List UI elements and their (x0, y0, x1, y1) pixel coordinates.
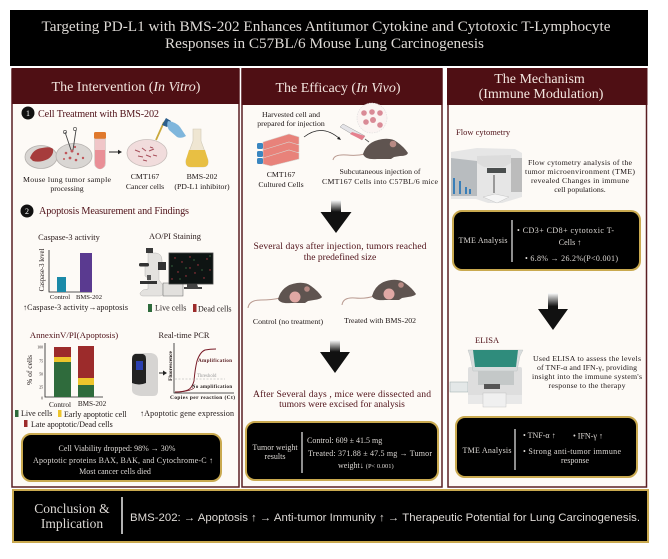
callout: TME analysis, T-cells (453, 211, 640, 270)
callout: viability findings (22, 434, 221, 481)
callout: TME analysis, T-cells: TME Analysis (458, 236, 508, 245)
callout: TME analysis, cytokines: response (561, 456, 589, 465)
label: subcutaneous injection (322, 167, 439, 186)
chart: caspase-3 activity: Caspase-3 activity (38, 233, 101, 242)
icon: AO/PI microscope and monitor: Live cells (155, 304, 186, 312)
callout: TME analysis, cytokines: • IFN-γ ↑ (573, 432, 603, 440)
text: flow cytometry description: cell populations. (554, 185, 606, 194)
icon: culture dish with pipette (127, 118, 186, 166)
text: flow cytometry description (525, 158, 635, 194)
label: harvested cells: prepared for injection (257, 119, 325, 128)
callout: tumor weight results (246, 422, 438, 480)
chart: real-time PCR: Threshold (197, 374, 217, 379)
callout: TME analysis, T-cells: Cells ↑ (559, 238, 581, 247)
callout: TME analysis, cytokines: • TNF-α ↑ (523, 431, 556, 440)
panel heading: the intervention (12, 68, 239, 104)
panel: the intervention (12, 68, 239, 487)
conclusion banner: Conclusion & (34, 501, 110, 516)
text: dissection: After Several days , mice were dissected and (253, 389, 431, 400)
icon: flow cytometer (451, 148, 522, 203)
icon: mouse (333, 139, 408, 160)
chart: real-time PCR: Real-time PCR (159, 331, 210, 340)
title banner: Responses in C57BL/6 Mouse Lung Carcinogenesis (165, 36, 484, 52)
label: cultured cells: Cultured Cells (258, 180, 304, 189)
callout: TME analysis, cytokines: • Strong anti-tumor immune (523, 447, 621, 456)
panel heading: the mechanism (447, 68, 648, 105)
panel heading: the efficacy (242, 68, 442, 105)
label: mouse groups: Control (no treatment) (253, 317, 323, 326)
legend: annexin V/PI: Live cells (21, 409, 52, 418)
icon: control mouse (248, 283, 322, 308)
step 1 labels: Mouse lung tumor sample (23, 175, 112, 184)
text: flow cytometry description: revealed Changes in immune (531, 176, 630, 185)
text: tumors reached size: the predefined size (304, 252, 376, 263)
arrow: flasks to mouse (304, 130, 341, 140)
label: mouse groups (253, 316, 416, 326)
callout: tumor weight results: Tumor weight (252, 443, 298, 452)
chart: annexin V/PI apoptosis: 25 (39, 386, 43, 390)
callout: tumor weight results: weight↓ (P< 0.001) (338, 461, 394, 470)
icon: AO/PI microscope and monitor (139, 232, 232, 314)
label: flow cytometry: Flow cytometry (456, 127, 511, 137)
conclusion banner: Implication (41, 516, 103, 531)
label: harvested cells (257, 110, 325, 128)
icon: tumor sample dishes (25, 127, 106, 169)
step 1 heading: Cell Treatment with BMS-202 (38, 109, 159, 120)
chart: annexin V/PI apoptosis: 50 (39, 372, 43, 376)
text: tumors reached size: Several days after injection, tumors reached (254, 241, 427, 252)
step 1 labels: BMS-202 (187, 172, 217, 181)
panel heading: the mechanism: (Immune Modulation) (479, 87, 604, 102)
icon: ELISA analyzer (450, 350, 523, 407)
label: subcutaneous injection: CMT167 Cells into C57BL/6 mice (322, 177, 439, 186)
text: ELISA description (532, 354, 642, 390)
chart: caspase-3 activity: Control (50, 294, 70, 301)
step 1 labels: CMT167 (131, 172, 159, 181)
callout: TME analysis, cytokines: TME Analysis (462, 446, 512, 455)
chart: real-time PCR: Copies per reaction (Ct) (170, 394, 235, 401)
arrow: processing to culture (109, 150, 122, 154)
label: cultured cells: CMT167 (267, 170, 295, 179)
text: ELISA description: insight into the immune system's (532, 372, 642, 381)
text: dissection (253, 389, 431, 410)
label: harvested cells: Harvested cell and (262, 110, 320, 119)
callout: TME analysis, T-cells: • 6.8% → 26.2%(P<0.001) (525, 254, 618, 263)
icon: culture flasks (257, 134, 299, 166)
step 1 labels: (PD-L1 inhibitor) (174, 182, 230, 191)
text: flow cytometry description: tumor microenvironment (TME) (525, 167, 635, 176)
arrow: down (320, 200, 352, 233)
legend: annexin V/PI: Early apoptotic cell (64, 410, 127, 419)
text: ELISA description: Used ELISA to assess the levels (533, 354, 641, 363)
arrow: down (320, 340, 350, 373)
chart: caspase-3 activity: BMS-202 (76, 294, 102, 301)
text: tumors reached size (254, 241, 427, 263)
chart: caspase-3 activity: ↑Caspase-3 activity→apoptosis (23, 303, 128, 312)
callout: viability findings: Apoptotic proteins BAX, BAK, and Cytochrome-C ↑ (33, 456, 213, 465)
step 1 labels: processing (50, 184, 84, 193)
legend: annexin V/PI: Late apoptotic/Dead cells (31, 420, 113, 429)
text: dissection: tumors were excised for analysis (279, 399, 405, 410)
chart: real-time PCR (132, 331, 235, 418)
chart: caspase-3 activity (23, 233, 128, 312)
chart: annexin V/PI apoptosis: 100 (37, 346, 43, 350)
icon: AO/PI microscope and monitor: Dead cells (198, 304, 232, 314)
panel heading: the efficacy: The Efficacy (In Vivo) (275, 81, 401, 96)
chart: annexin V/PI apoptosis: AnnexinV/PI(Apoptosis) (30, 330, 118, 340)
text: flow cytometry description: Flow cytometry analysis of the (528, 158, 633, 167)
label: mouse groups: Treated with BMS-202 (344, 316, 416, 325)
arrow: down (538, 293, 568, 330)
step 2 heading: Apoptosis Measurement and Findings (39, 206, 189, 217)
label: ELISA: ELISA (475, 335, 500, 345)
conclusion banner: BMS-202: → Apoptosis ↑ → Anti-tumor Immunity ↑ → Therapeutic Potential for Lung Carcinogenesis. (130, 512, 640, 524)
panel: the mechanism (447, 68, 648, 487)
icon: syringe (340, 124, 369, 142)
chart: annexin V/PI apoptosis: BMS-202 (78, 400, 107, 408)
title banner (10, 10, 648, 66)
chart: real-time PCR: Amplification (198, 358, 232, 364)
callout: tumor weight results: Control: 609 ± 41.5 mg (307, 436, 382, 445)
chart: annexin V/PI apoptosis: 75 (39, 360, 43, 364)
chart: annexin V/PI apoptosis (25, 330, 118, 409)
chart: annexin V/PI apoptosis: Control (49, 401, 71, 409)
panel heading: the intervention: The Intervention (In Vitro) (52, 80, 201, 95)
chart: annexin V/PI apoptosis: 0 (41, 396, 43, 400)
panel: the efficacy (242, 68, 442, 487)
icon: treated mouse (342, 280, 416, 305)
text: ELISA description: of TNF-α and IFN-γ, providing (537, 363, 637, 372)
step 2 heading: 2 (25, 207, 29, 216)
callout: TME analysis, cytokines (456, 417, 637, 477)
conclusion banner (13, 490, 648, 542)
icon: AO/PI microscope and monitor: AO/PI Staining (149, 232, 202, 241)
title banner: Targeting PD-L1 with BMS-202 Enhances Antitumor Cytokine and Cytotoxic T-Lymphocyte (42, 19, 610, 35)
chart: caspase-3 activity: Caspase-3 level (39, 248, 46, 291)
chart: real-time PCR: Fluorescence (168, 350, 174, 381)
label: cultured cells (258, 170, 304, 189)
icon: BMS-202 flask (186, 129, 208, 167)
step 1 labels (23, 172, 230, 193)
panel heading: the mechanism: The Mechanism (494, 72, 585, 87)
callout: viability findings: Most cancer cells died (79, 467, 151, 476)
step 1 heading: 1 (26, 109, 30, 118)
callout: tumor weight results: Treated: 371.88 ± 47.5 mg → Tumor (308, 449, 432, 458)
callout: viability findings: Cell Viability dropped: 98% → 30% (59, 444, 176, 453)
chart: annexin V/PI apoptosis: % of cells (25, 355, 34, 385)
label: subcutaneous injection: Subcutaneous injection of (340, 167, 421, 176)
text: ELISA description: response to the therapy (548, 381, 626, 390)
icon: injected cells bubble (357, 103, 387, 133)
step 1 labels: Cancer cells (126, 182, 164, 191)
callout: tumor weight results: results (265, 452, 285, 461)
chart: real-time PCR: ↑Apoptotic gene expression (140, 409, 234, 418)
chart: real-time PCR: No amplification (192, 385, 232, 390)
callout: TME analysis, T-cells: • CD3+ CD8+ cytotoxic T- (517, 226, 614, 235)
legend: annexin V/PI (15, 409, 127, 429)
